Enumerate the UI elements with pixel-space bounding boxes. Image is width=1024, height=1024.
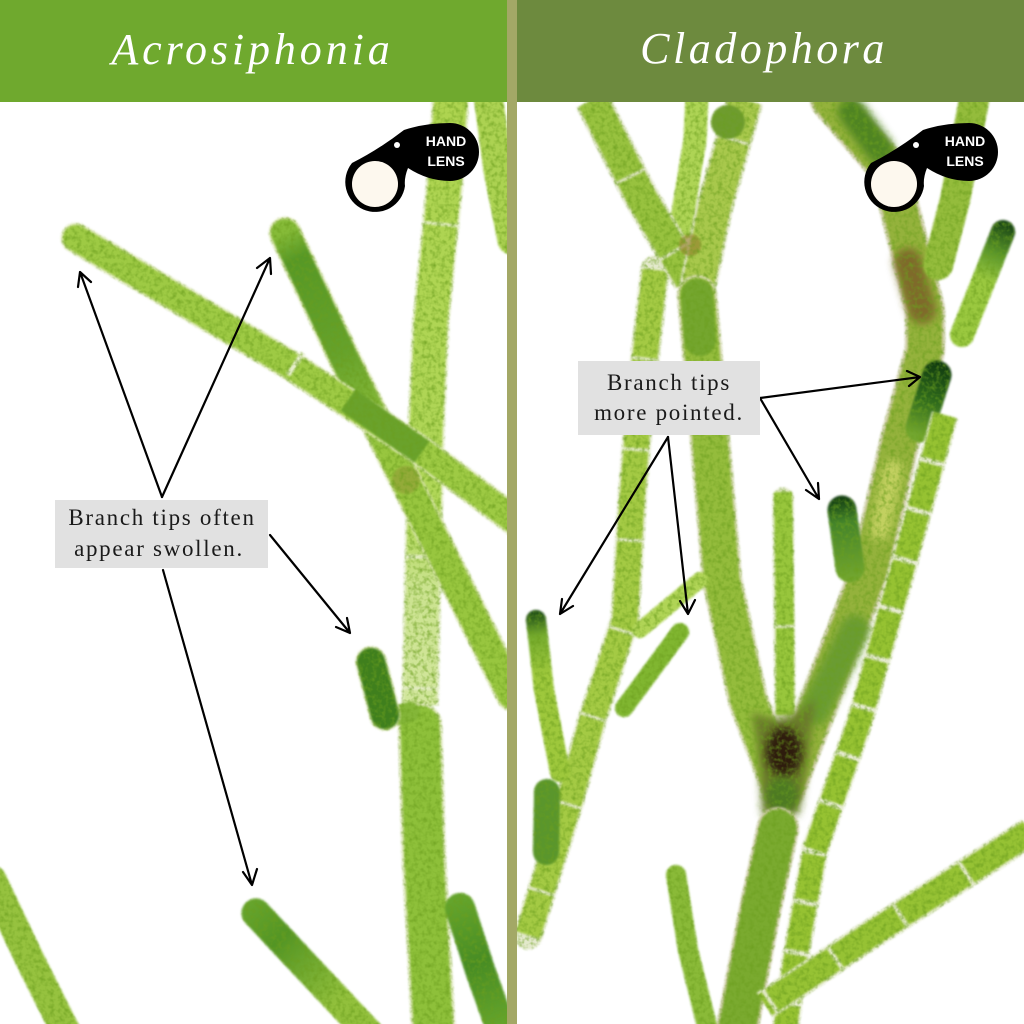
filament: top right [488,95,512,240]
header: Cladophora [517,0,1024,102]
icon: hand lens left: LENS [427,153,465,169]
side branches [624,580,700,708]
filament: main stem upper [420,95,451,705]
icon: hand lens left: HAND [426,133,466,149]
brown joint [392,466,420,494]
filament: segmented chain [785,415,945,1024]
callout: branch tips pointed [578,361,760,435]
tip: upper right pointed [962,232,1003,335]
filament: main stem lower [420,725,434,1024]
tip: centre dark [842,510,850,568]
filament: central stem [697,295,782,790]
panel: Acrosiphonia algae photo [0,95,530,1024]
callout: branch tips swollen: appear swollen. [74,536,244,561]
arrows: Cladophora [560,371,920,614]
callout: branch tips pointed: Branch tips [607,370,731,395]
filament: upper Y left [592,100,690,280]
panel divider [507,0,517,1024]
arrows: Acrosiphonia [78,258,350,885]
icon: hand lens right: HAND [945,133,985,149]
filament: left long [528,270,655,935]
tip: centre right pointed [920,375,937,428]
filament: upper right [938,95,975,265]
filament: upper Y right [697,100,745,290]
tip: centre green [783,492,785,715]
panel: Cladophora algae photo [528,95,1024,1024]
tip: lower left [536,620,560,772]
filament: long diagonal [76,238,530,532]
filament: bottom right [460,908,505,1024]
filament: lower small [676,875,708,1024]
header: Acrosiphonia [0,0,507,102]
filament: lower right diagonal [765,832,1024,1005]
callout: branch tips pointed: more pointed. [594,400,744,425]
icon: hand lens right [864,123,998,212]
filament: bottom left [0,880,70,1024]
fork junction dark [752,698,815,815]
bud: swollen tip [371,662,410,718]
icon: hand lens left [345,123,479,212]
filament: trunk [735,828,778,1024]
filament: bottom tip [256,913,380,1024]
icon: hand lens right: LENS [946,153,984,169]
tip: lower left dark [546,792,547,852]
filament: right stem [785,100,925,790]
filament: thin rear top [680,95,697,230]
title: Acrosiphonia: Acrosiphonia [108,25,394,74]
filament: branch crossing [285,233,512,695]
callout: branch tips swollen [55,500,268,568]
callout: branch tips swollen: Branch tips often [68,505,256,530]
title: Cladophora: Cladophora [640,24,888,73]
